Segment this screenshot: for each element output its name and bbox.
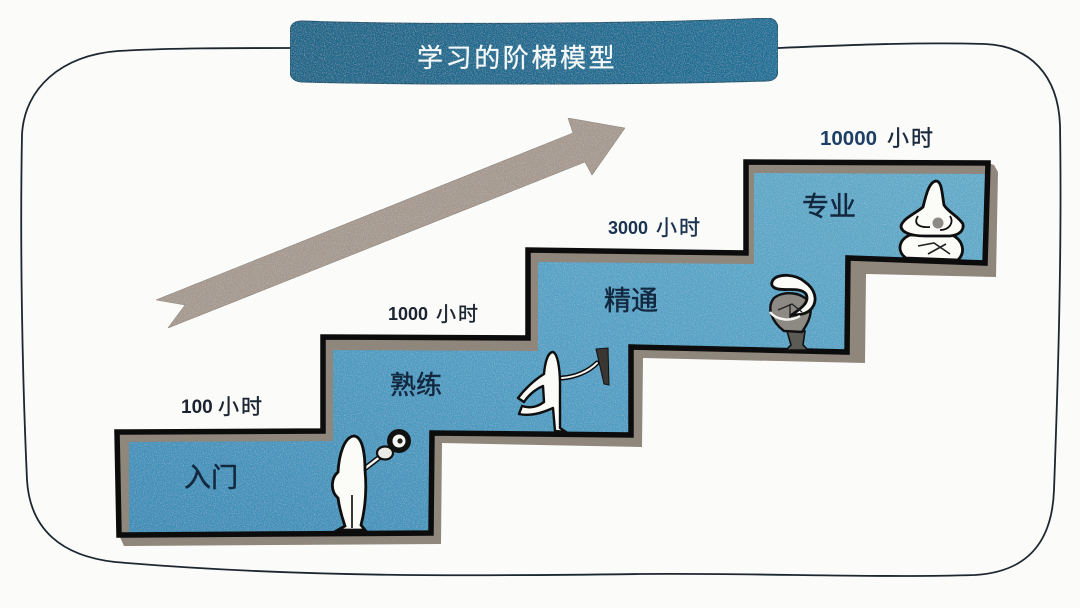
- rising arrow: [156, 118, 625, 328]
- hours: 1000 小时: 小时: [436, 303, 480, 326]
- hours: 10000 小时: 小时: [887, 126, 935, 151]
- figure: meditating master: [900, 181, 963, 260]
- step label: 专业: 专业: [802, 192, 856, 222]
- step label: 入门: 入门: [184, 463, 238, 493]
- figure: practitioner with tool: [518, 348, 609, 432]
- hours: 10000 小时: 10000: [820, 127, 877, 150]
- title: 学习的阶梯模型: [417, 43, 617, 73]
- hours: 3000 小时: 3000: [608, 218, 648, 238]
- step label: 精通: 精通: [604, 286, 658, 316]
- figure: lightbulb swirl: [770, 275, 815, 350]
- hours: 100 小时: 小时: [218, 396, 264, 419]
- staircase: [117, 162, 998, 546]
- step label: 熟练: 熟练: [390, 370, 442, 400]
- hours: 1000 小时: 1000: [388, 304, 428, 324]
- hours: 100 小时: 100: [181, 397, 213, 418]
- title banner: [290, 18, 778, 84]
- hours: 3000 小时: 小时: [656, 217, 702, 240]
- figure: beginner with magnifier: [332, 429, 411, 530]
